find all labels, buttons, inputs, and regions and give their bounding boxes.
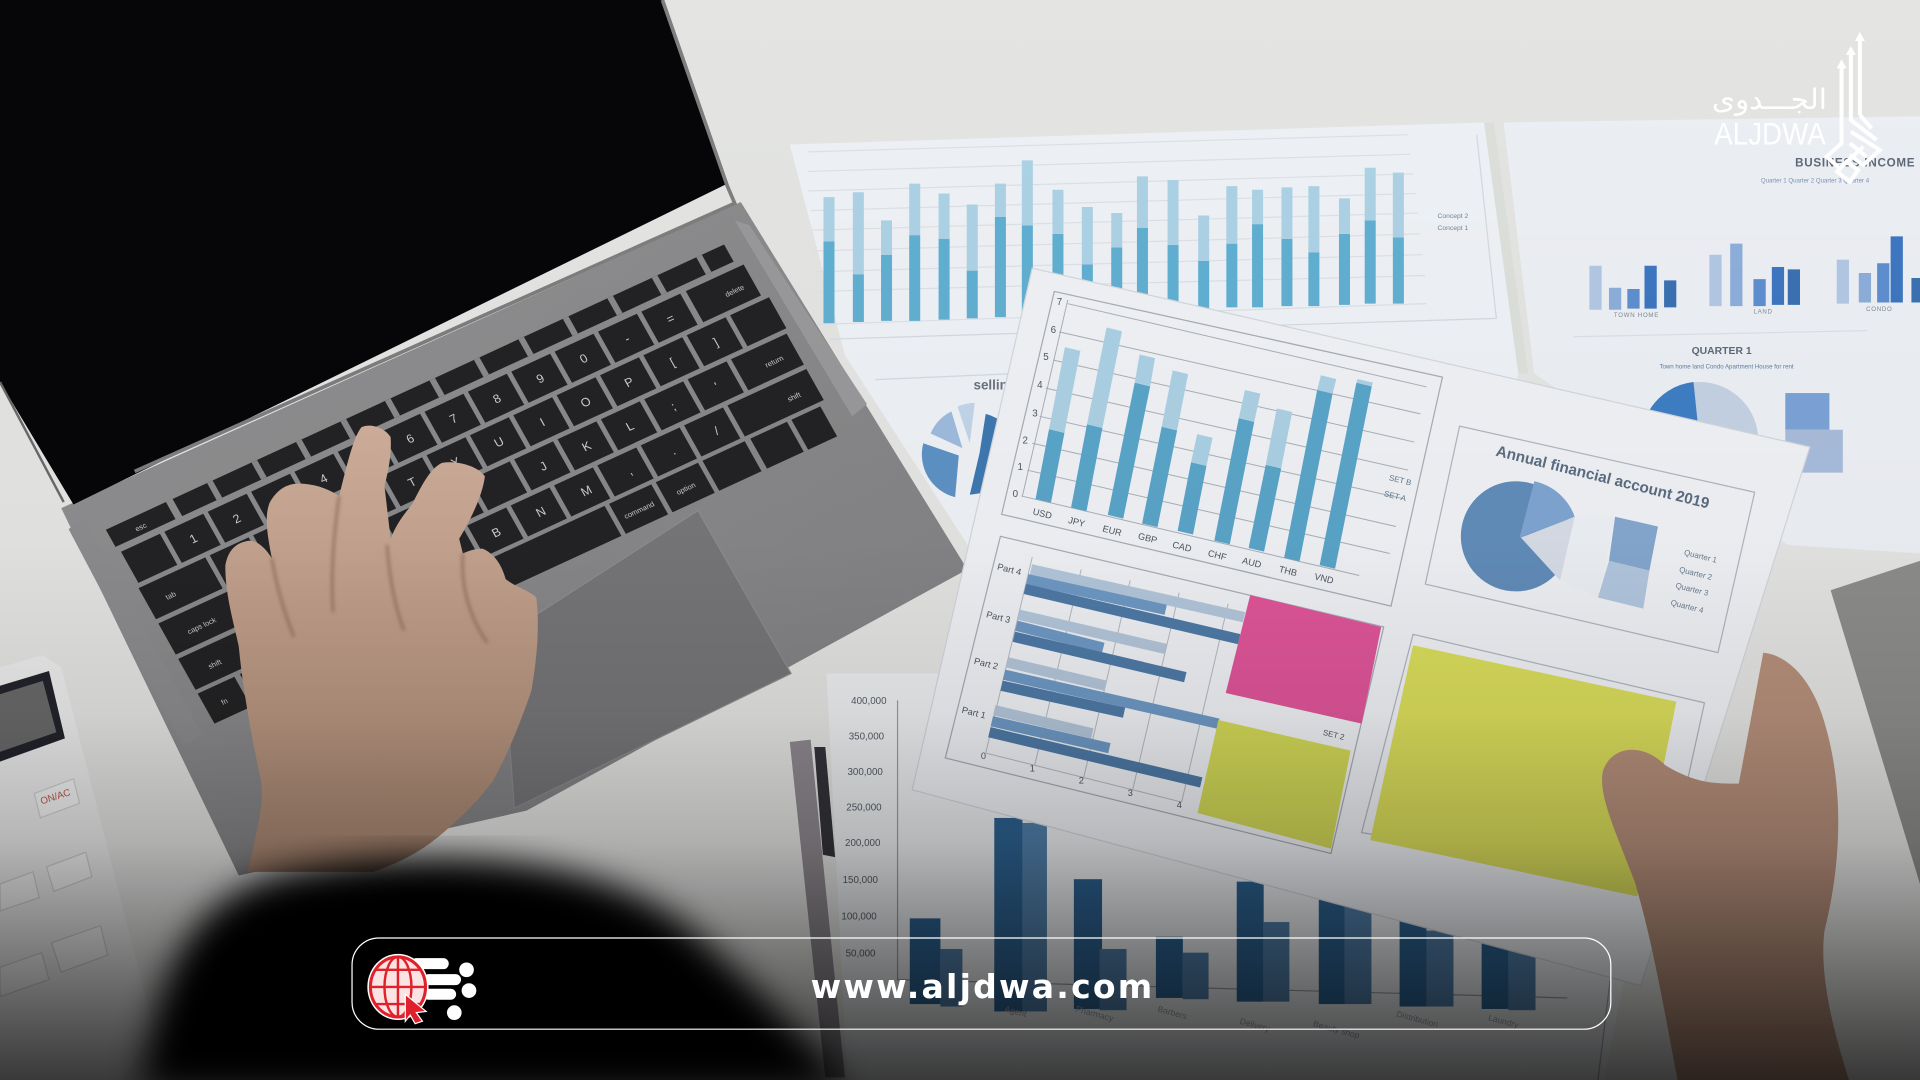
horizontal bar chart panel (945, 536, 1384, 853)
light bars (994, 569, 1244, 733)
income bars (1596, 236, 1918, 310)
quarter 1 pie: QUARTER 1 (1692, 346, 1752, 357)
quarter 1 pie: Town home land Condo Apartment House for rent (1659, 364, 1794, 371)
key legends: return (763, 354, 785, 369)
calculator: ON/AC (39, 787, 72, 807)
key legends: delete (723, 283, 746, 299)
back sheet: business income charts (1504, 116, 1920, 553)
vertical gridlines (986, 557, 1228, 802)
asdf row (167, 597, 258, 639)
annual pie panel (1425, 426, 1755, 653)
axis labels: 250,000 (846, 803, 882, 814)
value labels: 1 (1030, 763, 1035, 773)
axis labels: 400,000 (851, 696, 887, 707)
key legends: K (580, 438, 595, 454)
legend (1438, 213, 1468, 232)
dark bars (989, 589, 1239, 782)
axis labels: 150,000 (843, 875, 879, 886)
function row (111, 253, 729, 538)
quarter 1 pie (1573, 331, 1867, 500)
axis numbers: 4 (1037, 380, 1043, 391)
key legends: esc (133, 521, 148, 533)
part labels: Part 2 (973, 656, 999, 672)
light series bars (829, 160, 1398, 274)
group labels: LAND (1753, 308, 1773, 315)
key legends: N (533, 504, 548, 520)
calculator (0, 655, 153, 1080)
sticky note: pink (1226, 595, 1381, 724)
logo (1712, 32, 1880, 182)
key legends: shift (786, 390, 802, 404)
key legends: ; (668, 400, 678, 413)
axis numbers: 3 (1032, 408, 1038, 419)
axis labels (841, 696, 887, 959)
quarter legend (1670, 548, 1718, 615)
key legends: option (675, 480, 697, 497)
key legends: = (664, 311, 677, 326)
key legends: ' (712, 380, 721, 393)
axis numbers: 6 (1051, 325, 1057, 336)
footer url bar (352, 938, 1611, 1029)
key legends: caps lock (186, 615, 218, 636)
group labels: CONDO (1866, 306, 1893, 313)
axis numbers (1013, 297, 1062, 500)
laptop (0, 0, 967, 876)
value labels: 2 (1079, 776, 1084, 786)
key legends: 0 (577, 351, 590, 366)
currency labels (1032, 507, 1335, 586)
legend: Concept 1 (1438, 225, 1468, 232)
key legends: 7 (447, 411, 460, 426)
right hand holding sheet (1602, 653, 1849, 1080)
axis labels: 50,000 (846, 948, 876, 959)
set 2 legend: SET 2 (1322, 728, 1346, 742)
stacked exploded bar (1609, 517, 1658, 571)
key legends: P (622, 374, 636, 390)
quarter legend: Quarter 3 (1675, 581, 1710, 598)
key legends: - (622, 332, 632, 346)
currency labels: USD (1032, 507, 1053, 521)
currency labels: GBP (1137, 531, 1158, 545)
series B bars (1049, 328, 1373, 468)
currency labels: CAD (1171, 540, 1193, 554)
category labels: Beauty shop (1312, 1018, 1361, 1040)
currency labels: JPY (1067, 515, 1086, 529)
value labels: 0 (981, 751, 986, 761)
key legends: [ (668, 355, 678, 369)
key legends: / (712, 424, 722, 438)
globe icon (367, 954, 476, 1024)
category labels: Pharmacy (1075, 1004, 1115, 1024)
lid rim (135, 0, 735, 471)
logo arrows mark (1827, 32, 1880, 182)
speaker grille right (735, 220, 867, 416)
currency labels: CHF (1207, 548, 1228, 563)
cursor (405, 994, 426, 1024)
key legends: command (622, 499, 656, 521)
back sheet: concept bar chart (790, 122, 1528, 612)
key legends: 2 (230, 511, 244, 526)
selling pie box (876, 370, 1102, 497)
key legends: U (492, 434, 507, 450)
key legends: L (624, 419, 637, 434)
axis numbers: 0 (1013, 489, 1019, 500)
lower bar chart sheet (827, 673, 1629, 1080)
calculator buttons (0, 779, 108, 997)
key legends: . (668, 444, 678, 458)
axis labels: 200,000 (845, 838, 881, 849)
value labels: 3 (1128, 788, 1133, 798)
zxcv row (187, 623, 298, 674)
axis numbers: 2 (1022, 435, 1028, 446)
quarter legend: Quarter 1 (1683, 548, 1718, 565)
category labels: Delivery (1239, 1016, 1272, 1034)
heading: BUSINESS INCOME (1795, 157, 1915, 170)
category labels: Agent (1004, 1004, 1028, 1019)
set legend: SET A (1383, 489, 1408, 503)
logo latin wordmark: ALJDWA (1714, 115, 1826, 151)
category labels (1004, 1004, 1520, 1040)
front sheet (912, 268, 1810, 986)
finger creases (272, 496, 487, 643)
value labels (981, 751, 1182, 810)
speaker grille left (69, 519, 202, 747)
set legend (1383, 473, 1412, 503)
calculator display (0, 671, 65, 762)
key legends: 6 (404, 431, 417, 446)
key legends: 1 (187, 531, 200, 546)
key legends: B (489, 525, 504, 540)
selling pie box: selling (973, 377, 1016, 392)
key legends: 4 (317, 471, 330, 486)
legend: Quarter 1 Quarter 2 Quarter 3 Quarter 4 (1761, 177, 1870, 184)
category labels: Distribution (1395, 1009, 1440, 1029)
key legends: fn (219, 696, 229, 707)
notebook at right edge (1831, 561, 1920, 884)
trackpad (502, 511, 791, 808)
part labels: Part 3 (985, 609, 1011, 625)
speed lines (416, 964, 456, 994)
axis labels: 300,000 (847, 767, 883, 778)
key legends: ] (711, 335, 721, 349)
keyboard (106, 238, 840, 714)
sticky note: big yellow (1370, 645, 1676, 896)
currency labels: AUD (1241, 556, 1263, 570)
key legends: , (625, 464, 635, 478)
laptop base (61, 202, 967, 876)
key legends: M (578, 483, 595, 499)
key legends: Y (449, 455, 463, 470)
group labels: TOWN HOME (1614, 312, 1659, 319)
mid bars (992, 579, 1218, 748)
dark series bars (829, 217, 1398, 323)
part labels: Part 1 (961, 705, 987, 721)
gridlines (1021, 300, 1427, 576)
logo arabic wordmark: الجـــدوى (1712, 83, 1827, 116)
axis numbers: 1 (1018, 462, 1023, 473)
pen (790, 740, 845, 1078)
lower right panel outline (1362, 634, 1704, 882)
category labels: Barbers (1157, 1004, 1188, 1021)
pie slices (1461, 481, 1571, 591)
axis numbers: 7 (1057, 297, 1062, 308)
stacked bar chart panel (1002, 291, 1442, 606)
key legends: T (406, 474, 420, 490)
key legends: I (537, 415, 547, 429)
part labels: Part 4 (996, 562, 1022, 577)
quarter legend: Quarter 4 (1670, 598, 1705, 615)
number row (130, 309, 690, 567)
key legends: 8 (491, 391, 504, 406)
key legends: 9 (534, 371, 547, 386)
qwerty row (147, 573, 214, 604)
key legends: shift (206, 657, 223, 671)
bottom row (206, 421, 829, 709)
grid lines (808, 135, 1427, 324)
axis numbers: 5 (1043, 352, 1049, 363)
value labels: 4 (1177, 800, 1182, 810)
currency labels: VND (1313, 571, 1335, 586)
legend: Concept 2 (1438, 213, 1468, 220)
set legend: SET B (1388, 473, 1412, 487)
quarter legend: Quarter 2 (1678, 565, 1714, 582)
panel title: Annual financial account 2019 (1494, 443, 1711, 512)
axis labels: 350,000 (849, 732, 885, 743)
typing hand (225, 426, 538, 872)
axis labels: 100,000 (841, 912, 877, 923)
key legends: tab (164, 589, 178, 602)
currency labels: THB (1278, 564, 1298, 578)
key legends: O (578, 394, 594, 410)
dark sleeve shadow (141, 859, 845, 1080)
key legends: J (537, 459, 550, 474)
url text: www.aljdwa.com (811, 967, 1152, 1006)
sticky note: small yellow (1198, 720, 1351, 849)
category labels: Laundry (1487, 1012, 1520, 1030)
series A bars (1036, 383, 1372, 569)
currency labels: EUR (1102, 524, 1123, 538)
3D bars (910, 818, 1536, 1011)
url bar outline (352, 938, 1611, 1029)
part labels (961, 562, 1022, 721)
group labels (1614, 306, 1893, 319)
key legends (125, 253, 824, 707)
lid (0, 0, 727, 504)
